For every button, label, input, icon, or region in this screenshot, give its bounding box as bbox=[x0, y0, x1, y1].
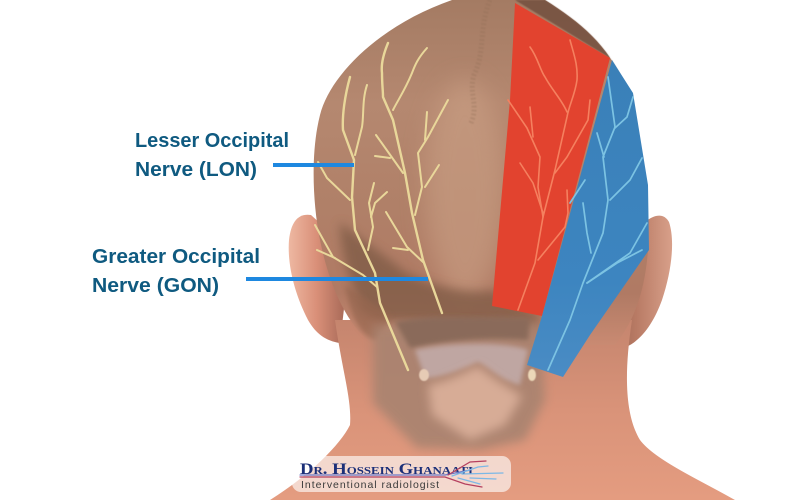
label: Lesser Occipital Nerve: Nerve (LON) bbox=[135, 159, 257, 181]
vertebra tips bbox=[419, 369, 429, 381]
illustration: head from behind bbox=[270, 0, 735, 500]
leader line: LON bbox=[273, 163, 354, 167]
logo rule and nerve mark bbox=[300, 461, 503, 487]
neck vertebrae window bbox=[373, 317, 545, 450]
panel: blue scalp zone bbox=[527, 60, 649, 377]
leader line: GON bbox=[246, 277, 428, 281]
icon: right ear bbox=[600, 216, 672, 347]
label: Greater Occipital Nerve: Nerve (GON) bbox=[92, 275, 219, 297]
icon: left ear bbox=[289, 215, 345, 343]
logo badge bbox=[292, 456, 511, 492]
label: Greater Occipital Nerve: Greater Occipital bbox=[92, 246, 260, 268]
blue zone nerves bbox=[548, 77, 647, 370]
dark occipital band bbox=[340, 222, 542, 335]
suture line bbox=[470, 0, 490, 125]
red zone nerves bbox=[508, 40, 590, 310]
lateral muscle shading bbox=[345, 285, 392, 340]
logo tagline: Interventional radiologist bbox=[301, 479, 439, 491]
label: Lesser Occipital Nerve bbox=[135, 130, 289, 181]
vertebra bands bbox=[395, 317, 530, 348]
skull bone highlight bbox=[425, 80, 505, 300]
nerves: left side yellow nerve branches bbox=[315, 43, 448, 370]
panel: red scalp zone bbox=[492, 3, 610, 316]
label: Lesser Occipital Nerve: Lesser Occipital bbox=[135, 130, 289, 152]
logo name: Dr. Hossein Ghanaati bbox=[300, 461, 473, 478]
shoulders and neck bbox=[270, 320, 735, 500]
label: Greater Occipital Nerve bbox=[92, 246, 260, 297]
skull bbox=[314, 0, 648, 345]
dark crown shading bbox=[515, 0, 625, 85]
